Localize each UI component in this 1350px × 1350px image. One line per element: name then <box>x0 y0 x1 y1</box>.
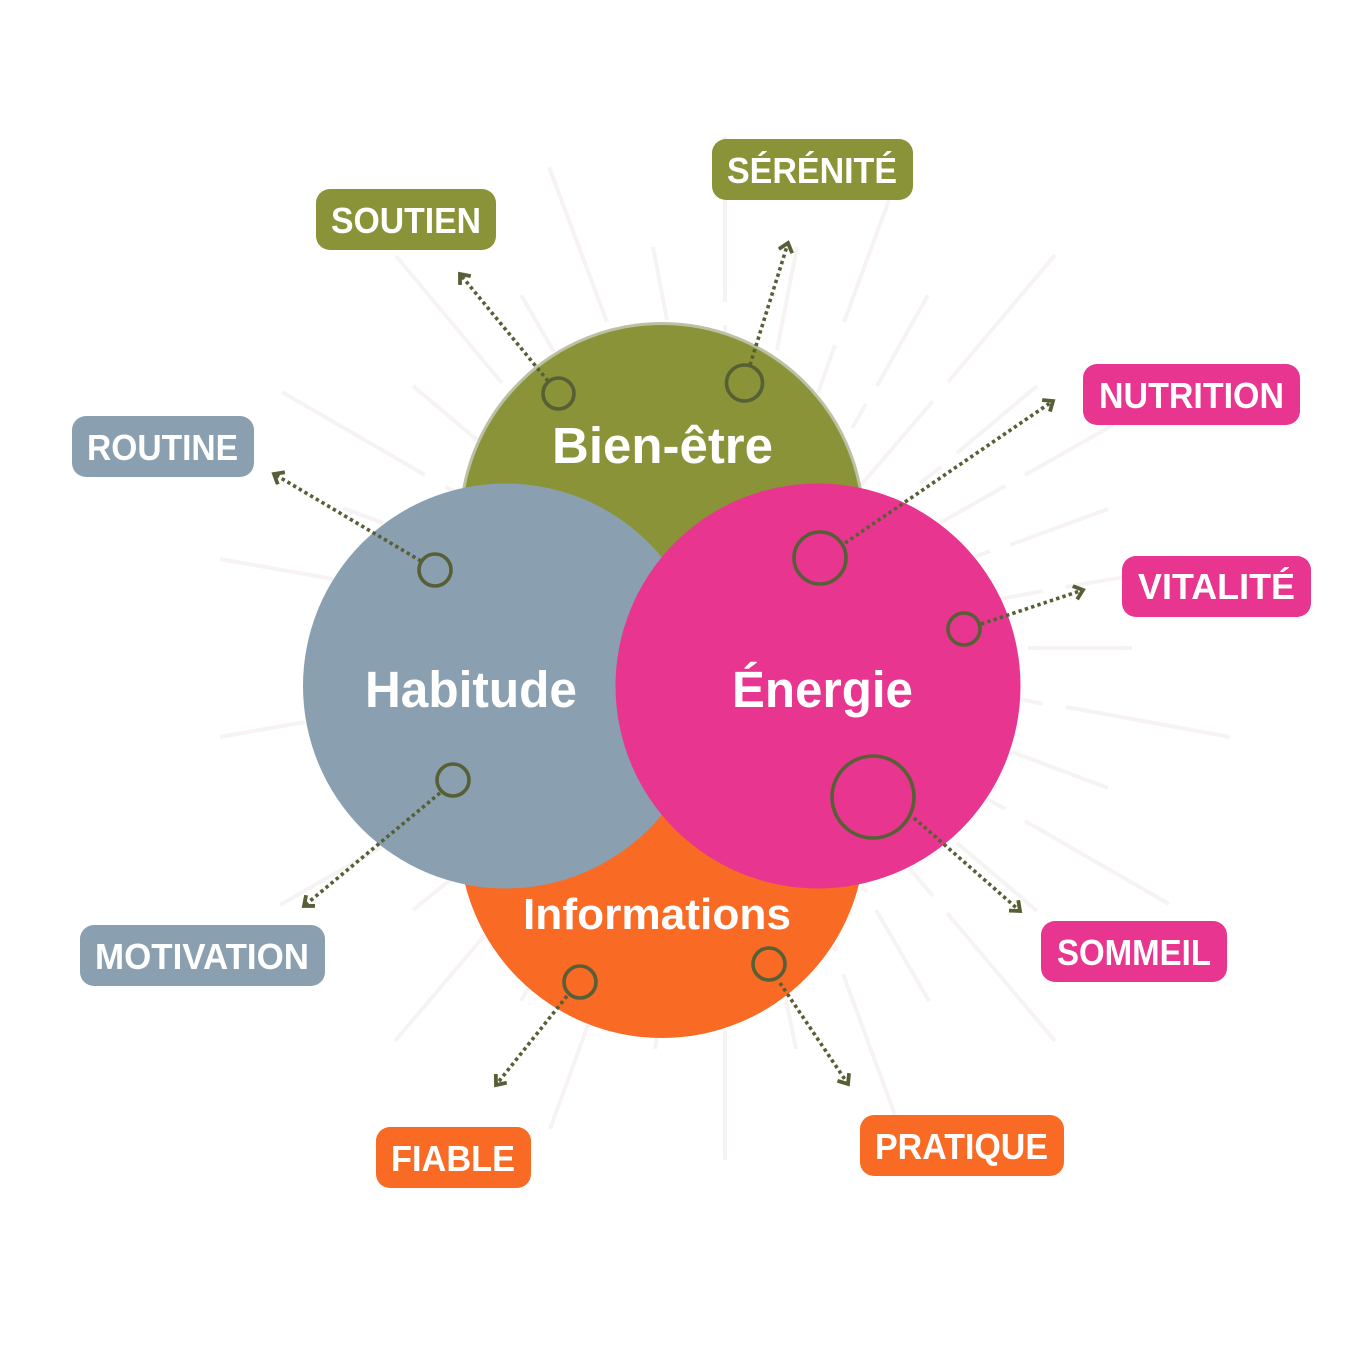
callout: Sérénité <box>712 139 913 401</box>
label: Routine <box>72 416 254 477</box>
label: Motivation: MOTIVATION <box>95 936 309 977</box>
label: Routine: ROUTINE <box>87 427 238 468</box>
arrow: Sérénité <box>750 243 788 365</box>
arrow: Sommeil <box>914 818 1020 911</box>
arrow: Fiable <box>496 996 567 1085</box>
marker ring: Fiable <box>564 966 596 998</box>
background rays <box>220 137 1230 1160</box>
label: Fiable <box>376 1127 531 1188</box>
callout: Vitalité <box>948 556 1311 645</box>
marker ring: Vitalité <box>948 613 980 645</box>
label: Sommeil: SOMMEIL <box>1057 932 1211 973</box>
arrow: Soutien <box>460 274 548 381</box>
arrow: Pratique <box>780 983 848 1084</box>
label: Pratique <box>860 1115 1064 1176</box>
arrow: Vitalité <box>981 590 1083 624</box>
callout: Sommeil <box>832 756 1227 982</box>
label: Soutien <box>316 189 496 250</box>
label: Soutien: SOUTIEN <box>331 200 481 241</box>
circle: Énergie <box>616 484 1020 888</box>
arrow: Motivation <box>304 793 440 906</box>
marker ring: Routine <box>419 554 451 586</box>
circle: Habitude <box>303 484 708 888</box>
circle: Informations <box>459 632 865 1038</box>
heading: Bien-être: Bien-être <box>552 417 773 474</box>
marker ring: Soutien <box>543 378 574 409</box>
marker ring: Nutrition <box>794 532 846 584</box>
label: Fiable: FIABLE <box>391 1138 515 1179</box>
label: Sommeil <box>1041 921 1227 982</box>
heading: Habitude: Habitude <box>365 661 577 718</box>
marker ring: Motivation <box>437 764 469 796</box>
marker ring: Pratique <box>753 948 785 980</box>
callout: Soutien <box>316 189 574 409</box>
arrow: Routine <box>274 474 421 561</box>
label: Nutrition: NUTRITION <box>1099 375 1284 416</box>
marker ring: Sérénité <box>726 365 762 401</box>
callout: Motivation <box>80 764 469 986</box>
label: Vitalité: VITALITÉ <box>1138 566 1295 607</box>
label: Nutrition <box>1083 364 1300 425</box>
label: Motivation <box>80 925 325 986</box>
callout: Fiable <box>376 966 596 1188</box>
heading: Informations: Informations <box>523 890 791 939</box>
arrow: Nutrition <box>845 401 1053 543</box>
heading: Énergie: Énergie <box>732 661 913 718</box>
circle: Bien-être <box>460 324 864 726</box>
callout: Nutrition <box>794 364 1300 584</box>
marker ring: Sommeil <box>832 756 914 838</box>
label: Pratique: PRATIQUE <box>875 1126 1048 1167</box>
label: Sérénité: SÉRÉNITÉ <box>727 150 897 191</box>
callout: Pratique <box>753 948 1064 1176</box>
label: Vitalité <box>1122 556 1311 617</box>
callout: Routine <box>72 416 451 586</box>
label: Sérénité <box>712 139 913 200</box>
